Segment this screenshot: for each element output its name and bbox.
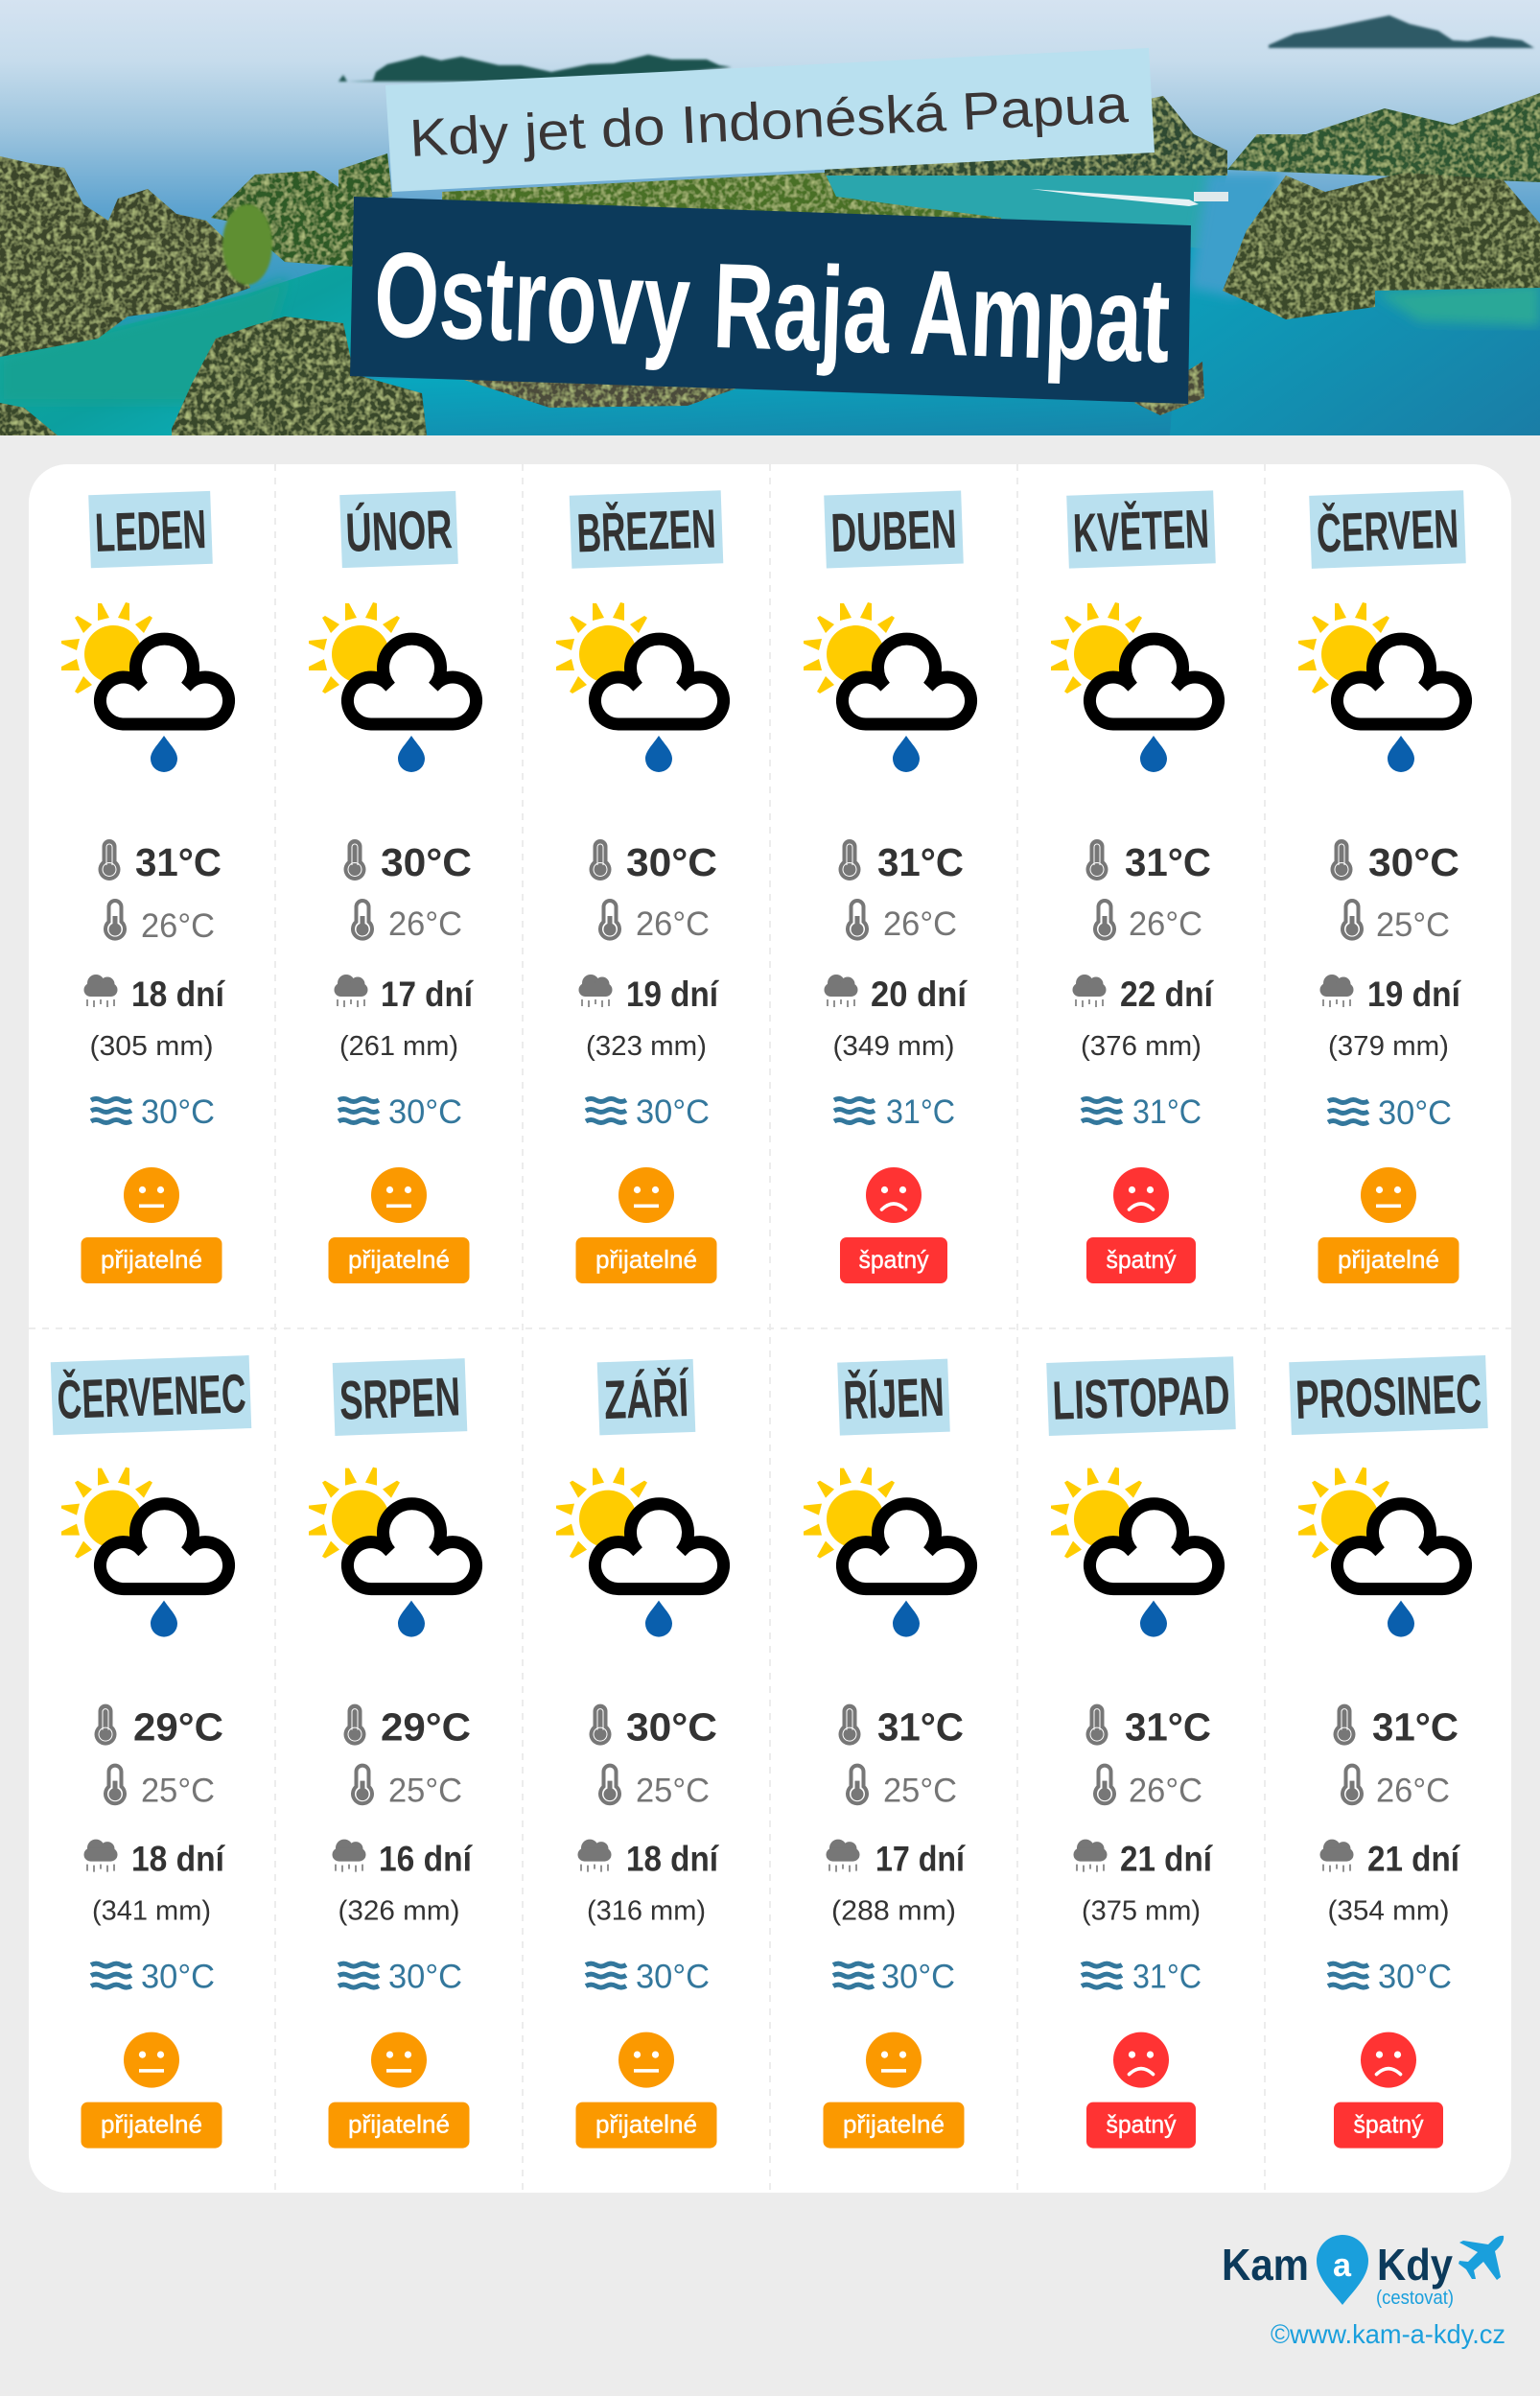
rating badge: špatný bbox=[1354, 2110, 1423, 2139]
sea temperature bbox=[833, 1959, 955, 1996]
icon: location pin bbox=[1317, 2235, 1368, 2305]
high temperature: 31°C bbox=[1372, 1705, 1458, 1750]
rating face bbox=[866, 1167, 922, 1223]
rainy days: 21 dní bbox=[1367, 1840, 1461, 1879]
sea temperature: 30°C bbox=[1378, 1959, 1452, 1996]
rating badge bbox=[1086, 1237, 1196, 1283]
low temperature bbox=[353, 1766, 462, 1810]
rating badge bbox=[1086, 2102, 1196, 2149]
low temperature: 25°C bbox=[388, 1773, 462, 1810]
title band bbox=[350, 197, 1191, 404]
rating badge bbox=[840, 1237, 947, 1283]
cell: LISTOPAD bbox=[1046, 1356, 1236, 2149]
weather icon bbox=[61, 602, 229, 772]
month label bbox=[1066, 490, 1216, 569]
icon: airplane bbox=[1458, 2236, 1504, 2280]
high temperature bbox=[1085, 839, 1211, 884]
sea temperature: 30°C bbox=[388, 1959, 462, 1996]
high temperature: 29°C bbox=[133, 1705, 223, 1750]
rainy days: 18 dní bbox=[131, 975, 226, 1014]
precipitation: (379 mm) bbox=[1328, 1031, 1449, 1062]
rainy days bbox=[1072, 975, 1215, 1014]
cell: ČERVENEC bbox=[51, 1355, 251, 2149]
rainy days: 22 dní bbox=[1120, 975, 1215, 1014]
sea temperature: 30°C bbox=[141, 1959, 215, 1996]
rating face bbox=[618, 1167, 674, 1223]
sea temperature: 30°C bbox=[881, 1959, 955, 1996]
sea temperature: 31°C bbox=[886, 1093, 955, 1131]
rating face bbox=[1113, 1167, 1169, 1223]
rainy days bbox=[332, 1840, 474, 1879]
rating badge: špatný bbox=[1107, 2110, 1176, 2139]
precipitation: (326 mm) bbox=[338, 1896, 460, 1927]
rating badge bbox=[575, 1237, 717, 1283]
high temperature bbox=[589, 839, 717, 884]
month label bbox=[88, 491, 213, 568]
rating face bbox=[371, 2032, 427, 2088]
high temperature bbox=[838, 839, 964, 884]
precipitation: (288 mm) bbox=[831, 1896, 956, 1927]
rainy days: 18 dní bbox=[131, 1840, 226, 1879]
high temperature bbox=[1333, 1704, 1458, 1750]
rating badge bbox=[1334, 2102, 1443, 2149]
sea temperature: 31°C bbox=[1132, 1959, 1202, 1996]
sea temperature bbox=[338, 1959, 462, 1996]
logo: Kam a Kdy bbox=[1222, 2235, 1504, 2309]
high temperature: 30°C bbox=[1368, 840, 1459, 884]
month label bbox=[51, 1355, 251, 1435]
precipitation: (376 mm) bbox=[1081, 1031, 1202, 1062]
rating badge bbox=[81, 2102, 222, 2149]
sea temperature: 30°C bbox=[141, 1093, 215, 1131]
low temperature: 26°C bbox=[1376, 1773, 1450, 1810]
month label bbox=[824, 491, 964, 568]
rainy days bbox=[579, 975, 720, 1014]
sea temperature bbox=[1328, 1959, 1452, 1996]
low temperature bbox=[105, 901, 215, 945]
rating badge: přijatelné bbox=[595, 1245, 697, 1274]
rating badge bbox=[328, 2102, 470, 2149]
rainy days bbox=[825, 975, 968, 1014]
month label: KVĚTEN bbox=[1072, 498, 1210, 564]
rating badge: přijatelné bbox=[595, 2110, 697, 2139]
rating face bbox=[1361, 2032, 1416, 2088]
high temperature: 31°C bbox=[135, 840, 222, 884]
high temperature: 30°C bbox=[381, 840, 472, 884]
logo: Kam a Kdy: (cestovat) bbox=[1376, 2288, 1454, 2309]
rating badge: špatný bbox=[859, 1245, 928, 1274]
precipitation: (349 mm) bbox=[832, 1031, 955, 1062]
precipitation: (323 mm) bbox=[586, 1031, 707, 1062]
low temperature bbox=[1095, 1766, 1202, 1810]
low temperature: 25°C bbox=[1376, 906, 1450, 944]
high temperature bbox=[343, 1704, 471, 1750]
sea temperature bbox=[91, 1093, 215, 1131]
cell: KVĚTEN bbox=[1051, 490, 1219, 1283]
cell: ČERVEN bbox=[1298, 490, 1466, 1283]
month label bbox=[597, 1359, 695, 1435]
month label: SRPEN bbox=[338, 1366, 461, 1432]
subtitle band: Kdy jet do Indonéská Papua bbox=[408, 74, 1130, 168]
rating badge: přijatelné bbox=[348, 2110, 450, 2139]
weather icon bbox=[1051, 602, 1219, 772]
main white panel bbox=[29, 464, 1511, 2193]
sea temperature bbox=[91, 1959, 215, 1996]
low temperature bbox=[848, 901, 957, 943]
cell: ZÁŘÍ bbox=[556, 1359, 724, 2149]
precipitation: (375 mm) bbox=[1082, 1896, 1201, 1927]
high temperature bbox=[1331, 839, 1459, 884]
header photo: tropical islands bbox=[0, 0, 1540, 435]
sea temperature bbox=[586, 1959, 710, 1996]
cell: ÚNOR bbox=[309, 491, 477, 1283]
high temperature bbox=[1085, 1704, 1211, 1750]
month label: LISTOPAD bbox=[1052, 1364, 1231, 1432]
rainy days: 17 dní bbox=[875, 1840, 966, 1879]
precipitation: (341 mm) bbox=[92, 1896, 211, 1927]
low temperature bbox=[600, 901, 710, 943]
low temperature: 26°C bbox=[141, 907, 215, 945]
cell: DUBEN bbox=[804, 491, 971, 1283]
high temperature: 31°C bbox=[1125, 840, 1211, 884]
month label bbox=[1046, 1356, 1236, 1436]
month label: ŘÍJEN bbox=[842, 1366, 945, 1431]
weather icon bbox=[1051, 1468, 1219, 1637]
high temperature bbox=[589, 1704, 717, 1750]
rating face bbox=[1361, 1167, 1416, 1223]
rainy days: 19 dní bbox=[626, 975, 720, 1014]
month label: ČERVENEC bbox=[56, 1362, 247, 1431]
cell: BŘEZEN bbox=[556, 490, 724, 1283]
logo: Kam a Kdy: a bbox=[1333, 2247, 1352, 2284]
rainy days bbox=[577, 1840, 720, 1879]
low temperature bbox=[353, 901, 462, 943]
month label bbox=[333, 1358, 467, 1436]
high temperature: 31°C bbox=[877, 840, 964, 884]
low temperature: 25°C bbox=[636, 1773, 710, 1810]
logo: Kam a Kdy: Kdy bbox=[1377, 2240, 1453, 2290]
rating badge: přijatelné bbox=[101, 2110, 202, 2139]
sea temperature: 30°C bbox=[636, 1959, 710, 1996]
rating badge: přijatelné bbox=[101, 1245, 202, 1274]
rainy days bbox=[84, 975, 226, 1014]
precipitation: (354 mm) bbox=[1327, 1896, 1450, 1927]
rating face bbox=[124, 2032, 179, 2088]
precipitation: (305 mm) bbox=[90, 1031, 213, 1062]
cell: PROSINEC bbox=[1289, 1355, 1488, 2149]
rainy days bbox=[827, 1840, 966, 1879]
rating face bbox=[124, 1167, 179, 1223]
low temperature: 26°C bbox=[883, 905, 957, 943]
sea temperature: 30°C bbox=[388, 1093, 462, 1131]
month label: LEDEN bbox=[94, 499, 207, 564]
rating badge: přijatelné bbox=[348, 1245, 450, 1274]
sea temperature bbox=[834, 1093, 955, 1131]
rating face bbox=[866, 2032, 922, 2088]
high temperature: 30°C bbox=[626, 840, 717, 884]
weather icon bbox=[309, 602, 477, 772]
month label: DUBEN bbox=[829, 499, 958, 564]
cell: LEDEN bbox=[61, 491, 229, 1283]
rating badge: přijatelné bbox=[843, 2110, 945, 2139]
weather icon bbox=[804, 1468, 971, 1637]
rainy days: 16 dní bbox=[379, 1840, 474, 1879]
sea temperature bbox=[1082, 1093, 1202, 1131]
sea temperature: 30°C bbox=[1378, 1094, 1452, 1132]
high temperature bbox=[98, 839, 222, 884]
weather icon bbox=[309, 1468, 477, 1637]
low temperature: 26°C bbox=[388, 905, 462, 943]
rainy days: 18 dní bbox=[626, 1840, 720, 1879]
low temperature bbox=[848, 1766, 957, 1810]
precipitation: (316 mm) bbox=[587, 1896, 706, 1927]
month label: ČERVEN bbox=[1316, 497, 1459, 565]
weather icon bbox=[804, 602, 971, 772]
month label bbox=[570, 490, 723, 569]
high temperature bbox=[343, 839, 472, 884]
subtitle band bbox=[385, 48, 1155, 192]
high temperature: 30°C bbox=[626, 1705, 717, 1750]
rainy days: 21 dní bbox=[1120, 1840, 1214, 1879]
sea temperature bbox=[1328, 1094, 1452, 1132]
title band: Ostrovy Raja Ampat bbox=[372, 226, 1172, 388]
rating badge bbox=[575, 2102, 717, 2149]
sea temperature: 30°C bbox=[636, 1093, 710, 1131]
high temperature bbox=[94, 1704, 223, 1750]
low temperature bbox=[1095, 901, 1202, 943]
rating face bbox=[618, 2032, 674, 2088]
high temperature bbox=[838, 1704, 964, 1750]
website credit: ©www.kam-a-kdy.cz bbox=[1271, 2319, 1505, 2349]
low temperature: 26°C bbox=[1129, 905, 1202, 943]
weather icon bbox=[556, 602, 724, 772]
rainy days bbox=[1074, 1840, 1214, 1879]
weather icon bbox=[1298, 602, 1466, 772]
month label bbox=[837, 1359, 950, 1436]
rainy days bbox=[1319, 975, 1462, 1014]
high temperature: 31°C bbox=[877, 1705, 964, 1750]
month label: ZÁŘÍ bbox=[603, 1366, 691, 1431]
sea temperature: 31°C bbox=[1132, 1093, 1202, 1131]
precipitation: (261 mm) bbox=[339, 1031, 458, 1062]
month label bbox=[1309, 490, 1466, 569]
weather icon bbox=[556, 1468, 724, 1637]
month label: ÚNOR bbox=[344, 499, 454, 564]
weather icon bbox=[61, 1468, 229, 1637]
weather icon bbox=[1298, 1468, 1466, 1637]
sea temperature bbox=[586, 1093, 710, 1131]
cell: ŘÍJEN bbox=[804, 1359, 971, 2149]
rating badge: přijatelné bbox=[1338, 1245, 1439, 1274]
month label bbox=[339, 491, 458, 568]
low temperature bbox=[1342, 1766, 1450, 1810]
low temperature bbox=[1342, 901, 1450, 944]
rainy days bbox=[334, 975, 475, 1014]
low temperature: 26°C bbox=[1129, 1773, 1202, 1810]
cell: SRPEN bbox=[309, 1358, 477, 2149]
rainy days bbox=[84, 1840, 226, 1879]
month label: BŘEZEN bbox=[575, 497, 717, 565]
rating badge: špatný bbox=[1107, 1245, 1176, 1274]
low temperature: 25°C bbox=[883, 1773, 957, 1810]
rainy days: 19 dní bbox=[1367, 975, 1462, 1014]
rainy days bbox=[1319, 1840, 1461, 1879]
high temperature: 29°C bbox=[381, 1705, 471, 1750]
low temperature: 25°C bbox=[141, 1773, 215, 1810]
logo: Kam a Kdy: Kam bbox=[1222, 2240, 1309, 2290]
rating face bbox=[1113, 2032, 1169, 2088]
rating face bbox=[371, 1167, 427, 1223]
rating badge bbox=[81, 1237, 222, 1283]
rainy days: 17 dní bbox=[381, 975, 475, 1014]
rating badge bbox=[1318, 1237, 1459, 1283]
high temperature: 31°C bbox=[1125, 1705, 1211, 1750]
sea temperature bbox=[338, 1093, 462, 1131]
rating badge bbox=[328, 1237, 470, 1283]
rainy days: 20 dní bbox=[871, 975, 968, 1014]
low temperature: 26°C bbox=[636, 905, 710, 943]
low temperature bbox=[600, 1766, 710, 1810]
low temperature bbox=[105, 1766, 215, 1810]
rating badge bbox=[823, 2102, 965, 2149]
sea temperature bbox=[1082, 1959, 1202, 1996]
